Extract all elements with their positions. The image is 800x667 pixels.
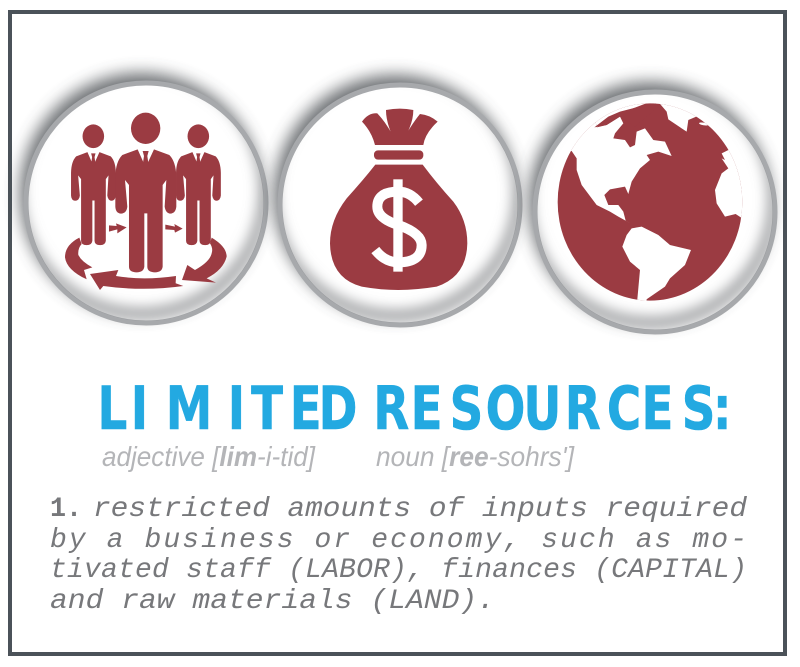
arrow: circular bottom <box>90 270 183 290</box>
arrow: small right <box>165 224 183 233</box>
center man <box>115 113 176 272</box>
subtitle: adjective pronunciation: adjective [lim-i-tid] <box>102 441 316 472</box>
title: LIMITED <box>97 373 357 443</box>
subtitle: noun pronunciation: noun [ree-sohrs'] <box>376 441 575 472</box>
arrow: small left <box>109 223 127 233</box>
left man <box>71 124 116 245</box>
right man <box>176 124 221 245</box>
definition text: 1. <box>50 494 82 525</box>
definition text: tivated staff (LABOR), finances (CAPITAL) <box>50 555 747 586</box>
arrow: circular right <box>182 238 227 283</box>
title: RESOURCES: <box>373 373 732 443</box>
definition text: by a business or economy, such as mo- <box>50 525 747 556</box>
panel: labor <box>17 66 266 323</box>
arrow: circular left <box>65 238 92 279</box>
icon: globe <box>558 103 742 301</box>
definition text: restricted amounts of inputs required <box>93 494 747 525</box>
panel: capital <box>271 68 520 325</box>
icon: three businessmen with circular arrows <box>65 113 227 290</box>
definition text <box>50 494 747 617</box>
title <box>97 373 732 443</box>
badge: capital <box>271 68 520 325</box>
badge: land <box>526 75 775 332</box>
definition text: and raw materials (LAND). <box>50 586 495 617</box>
badge: labor <box>17 66 266 323</box>
panel: land <box>526 75 775 332</box>
icon: money bag <box>330 109 467 290</box>
